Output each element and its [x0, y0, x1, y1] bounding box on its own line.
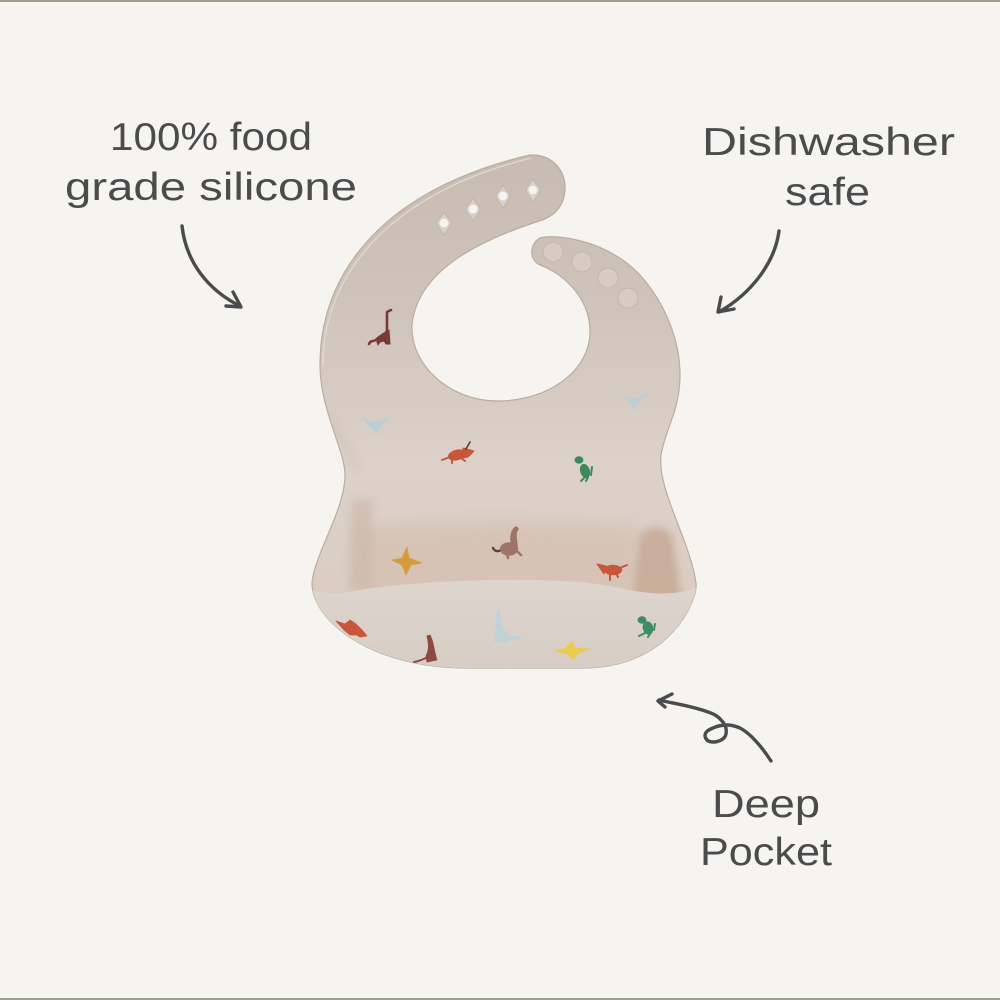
label: food grade silicone: [65, 116, 357, 209]
arrow: silicone label to bib: [182, 226, 241, 307]
dino: pale blue flyer left: [362, 418, 389, 433]
label: dishwasher safe: safe: [785, 171, 870, 214]
strap highlight edge: [323, 158, 531, 365]
label: food grade silicone: grade silicone: [65, 166, 357, 209]
dino: green rex top: [575, 457, 592, 481]
snap buttons: [543, 242, 638, 308]
dino: red stegosaurus: [336, 620, 367, 637]
top border: [0, 0, 1000, 2]
dinosaur prints: [336, 310, 655, 662]
bib: [300, 155, 705, 680]
dino: red triceratops: [442, 442, 474, 463]
bottom border: [0, 998, 1000, 1000]
dino: maroon sauropod front: [414, 635, 437, 662]
arrow: deep pocket label to bib with loop: [658, 694, 771, 761]
strap fastening holes: [437, 179, 540, 235]
strap hole openings: [440, 186, 537, 227]
label: dishwasher safe: [702, 121, 955, 214]
arrow: dishwasher label to bib: [718, 231, 779, 312]
dino: yellow pterodactyl front: [554, 641, 590, 660]
label: deep pocket: [700, 783, 832, 874]
dino: green rex front: [638, 617, 655, 637]
pocket interior shading: [318, 400, 682, 600]
bib body silhouette: [312, 155, 696, 668]
label: dishwasher safe: Dishwasher: [702, 121, 955, 164]
pocket front lip: [312, 580, 696, 668]
label: food grade silicone: 100% food: [110, 116, 312, 159]
label: deep pocket: Deep: [712, 783, 820, 826]
dino: red triceratops right: [597, 564, 627, 580]
dino: maroon long neck: [369, 310, 391, 345]
dino: ochre pterodactyl: [392, 547, 422, 575]
label: deep pocket: Pocket: [700, 831, 832, 874]
dino: pale blue flyer right: [620, 393, 648, 409]
dino: brown sauropod: [493, 527, 521, 558]
dino: pale blue sauropod front: [493, 610, 525, 642]
